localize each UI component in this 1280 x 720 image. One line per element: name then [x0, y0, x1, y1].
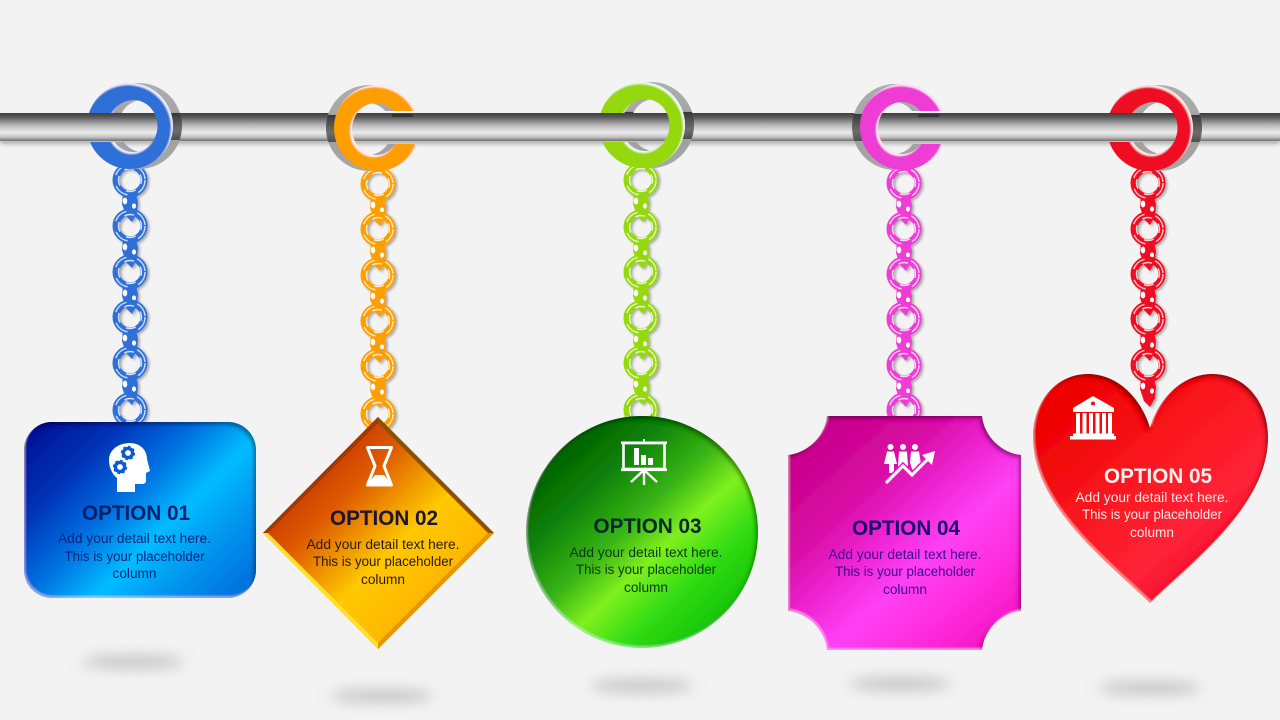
- panel: option 05: [1033, 374, 1268, 603]
- detail text: This is your placeholder: [835, 564, 975, 579]
- panel: option 02: [263, 417, 494, 649]
- detail text: This is your placeholder: [576, 562, 716, 577]
- icon: presentation board: [621, 439, 667, 485]
- diamond facet: bottom left: [263, 533, 378, 649]
- detail text: column: [1130, 525, 1174, 540]
- ring: pink: [852, 84, 946, 170]
- heading: OPTION 03: [594, 515, 702, 538]
- detail text: Add your detail text here.: [1076, 490, 1228, 505]
- icon: hourglass: [366, 448, 393, 486]
- panel: option 03: [526, 416, 758, 648]
- pink scooped tag: [788, 416, 1021, 650]
- ring: green: [599, 82, 694, 168]
- red heart tag: [1033, 374, 1268, 603]
- detail text: This is your placeholder: [1082, 507, 1222, 522]
- detail text: [828, 547, 982, 597]
- floor shadows: [81, 655, 1202, 703]
- heading: OPTION 05: [1104, 465, 1212, 488]
- detail text: Add your detail text here.: [306, 537, 460, 552]
- detail text: Add your detail text here.: [58, 531, 211, 546]
- heading: OPTION 02: [330, 507, 438, 530]
- ring: blue: [87, 83, 182, 169]
- diamond facet: bottom right: [378, 533, 494, 649]
- chain: red: [1133, 168, 1163, 407]
- detail text: [1076, 490, 1228, 540]
- detail text: Add your detail text here.: [570, 545, 722, 560]
- detail text: [58, 531, 211, 581]
- heading: OPTION 04: [852, 517, 960, 540]
- panel: option 01: [24, 422, 256, 598]
- detail text: This is your placeholder: [313, 554, 453, 569]
- detail text: Add your detail text here.: [828, 547, 982, 562]
- detail text: column: [883, 582, 927, 597]
- ring: red: [1107, 85, 1202, 171]
- blue rounded tag: [24, 422, 256, 598]
- rod: [0, 113, 1280, 144]
- chain: blue: [115, 165, 145, 452]
- detail text: [570, 545, 722, 595]
- diamond facet: top right: [378, 417, 494, 533]
- chain: pink: [889, 168, 919, 452]
- detail text: This is your placeholder: [64, 549, 205, 564]
- ring: orange: [326, 85, 420, 171]
- detail text: column: [624, 580, 668, 595]
- icon: bank building: [1070, 396, 1116, 440]
- chain: orange: [363, 169, 393, 456]
- orange diamond tag: [263, 417, 494, 649]
- diamond facet: top left: [263, 417, 378, 533]
- panel: option 04: [788, 416, 1021, 650]
- chain: green: [626, 165, 656, 452]
- icon: head with gears: [109, 443, 150, 492]
- heading: OPTION 01: [82, 502, 190, 525]
- detail text: column: [112, 566, 156, 581]
- green circle tag: [526, 416, 758, 648]
- detail text: column: [361, 572, 405, 587]
- detail text: [306, 537, 460, 587]
- icon: team with rising arrow: [884, 444, 935, 483]
